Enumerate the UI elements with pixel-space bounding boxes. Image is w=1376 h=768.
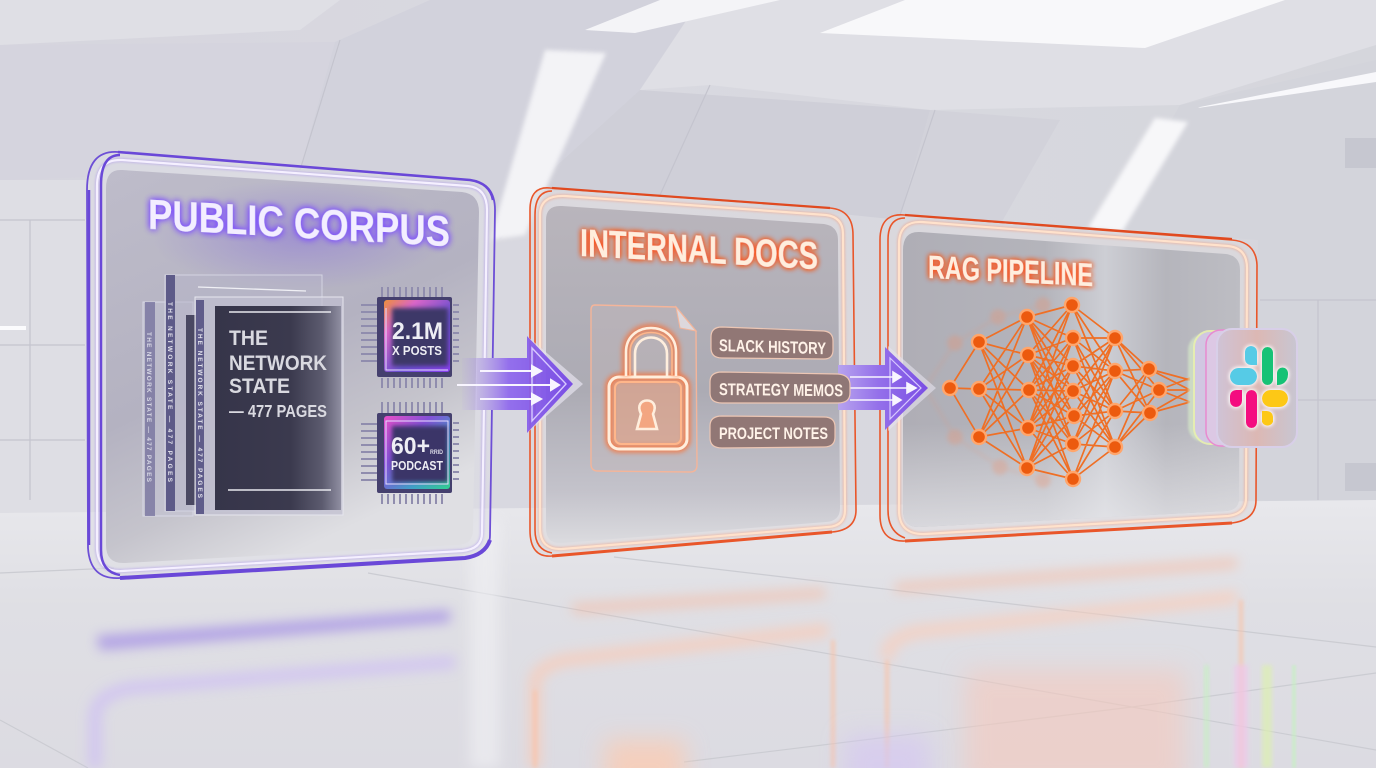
chip: 2.1M x posts — [361, 287, 459, 388]
back book middle: THE NETWORK STATE — 477 PAGES — [166, 302, 173, 483]
pill: strategy memos — [710, 372, 850, 403]
front book: THE NETWORK STATE — 477 PAGES — [196, 328, 203, 499]
icon: locked document — [591, 305, 697, 472]
back book left — [143, 302, 193, 516]
arrow: corpus to internal docs — [457, 336, 583, 433]
books: the network state — [143, 275, 343, 516]
icon: slack glass tile — [1188, 329, 1297, 447]
panel 3 heading: RAG PIPELINE — [928, 249, 1093, 293]
book cover title: — 477 PAGES — [229, 401, 327, 421]
pill: strategy memos: STRATEGY MEMOS — [719, 380, 843, 400]
pill: slack history — [711, 327, 833, 359]
panel 1 heading: PUBLIC CORPUS — [148, 191, 450, 256]
pill: project notes — [710, 416, 835, 448]
book cover title: NETWORK — [229, 352, 327, 375]
panel 2 heading: INTERNAL DOCS — [580, 222, 818, 278]
chip: 2.1M x posts: X POSTS — [392, 343, 442, 358]
arrow: internal docs to rag pipeline — [838, 346, 936, 431]
panel: internal docs — [530, 188, 936, 556]
chip: 60+ podcast — [361, 402, 459, 504]
back book middle — [165, 275, 322, 511]
chip: 60+ podcast: PODCAST — [391, 459, 443, 473]
chip: 2.1M x posts: 2.1M — [392, 318, 443, 345]
pill: project notes: PROJECT NOTES — [719, 424, 828, 443]
front book — [195, 297, 343, 515]
neural network — [943, 298, 1190, 486]
panel 2 glass body — [530, 188, 856, 556]
book cover title: STATE — [229, 375, 290, 398]
panel: rag pipeline — [880, 215, 1297, 541]
floor reflections and tile lines — [0, 520, 1376, 768]
pill: slack history: SLACK HISTORY — [719, 336, 827, 358]
ghost network reflection — [925, 298, 1050, 487]
book cover title — [229, 327, 327, 421]
chip: 60+ podcast: 60+ — [391, 433, 430, 460]
panel: public corpus — [87, 152, 495, 578]
panel 3 glass body — [880, 215, 1257, 541]
chip: 60+ podcast: RRID — [430, 450, 444, 456]
back book left: THE NETWORK STATE — 477 PAGES — [145, 332, 152, 483]
panel 1 glass body — [87, 152, 495, 578]
book cover title: THE — [229, 327, 268, 350]
